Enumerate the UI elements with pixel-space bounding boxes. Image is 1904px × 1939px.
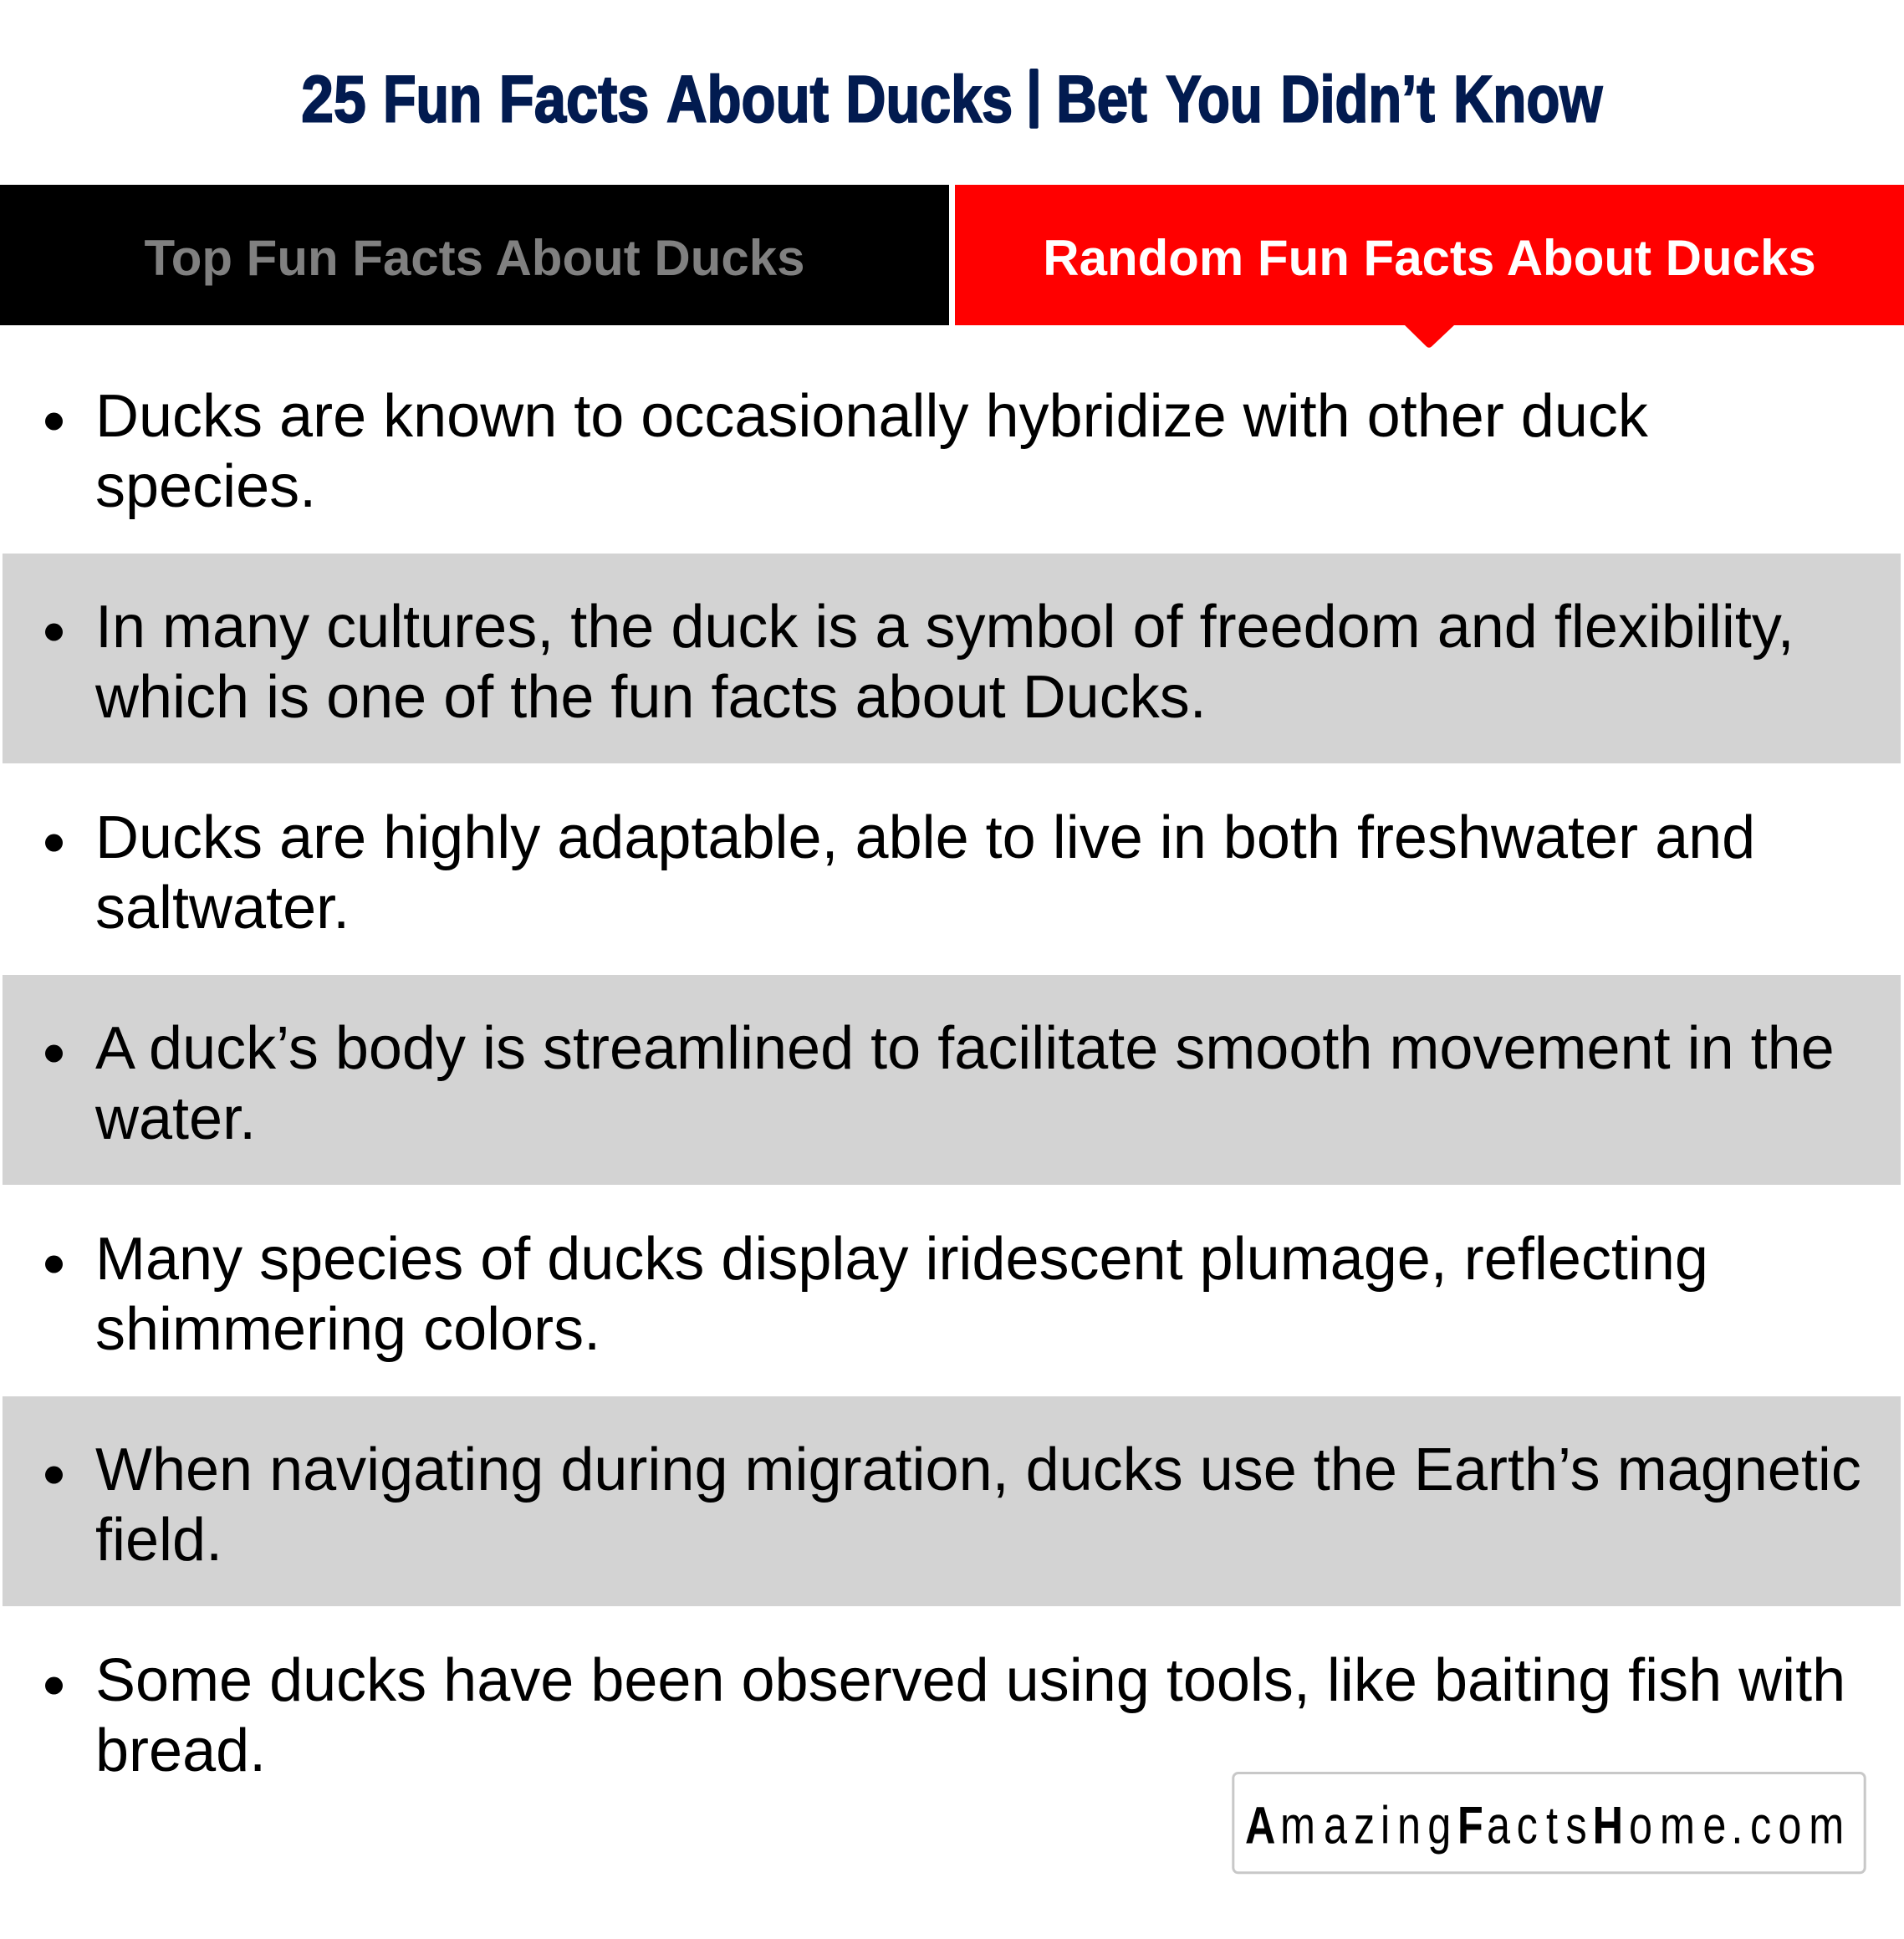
fact 1: Ducks are known to occasionally hybridize with other duck	[95, 383, 1649, 450]
fact 6: When navigating during migration, ducks use the Earth’s magnetic	[95, 1436, 1861, 1503]
fact 4: A duck’s body is streamlined to facilitate smooth movement in the	[95, 1015, 1835, 1082]
fact 6	[3, 1396, 1901, 1606]
title: Bet	[1056, 62, 1147, 136]
fact 5: Many species of ducks display iridescent plumage, reflecting	[95, 1226, 1708, 1293]
watermark logo	[1233, 1773, 1865, 1873]
tab: top fun facts: Top Fun Facts About Ducks	[144, 230, 804, 286]
fact 7: Some ducks have been observed using tools, like baiting fish with	[95, 1647, 1845, 1714]
tab: random fun facts (active)	[955, 185, 1904, 348]
fact 2: In many cultures, the duck is a symbol of freedom and flexibility,	[95, 594, 1794, 661]
fact 1	[45, 383, 1649, 520]
fact 5: shimmering colors.	[95, 1296, 600, 1363]
title: Didn’t	[1280, 62, 1435, 136]
title: About	[666, 62, 829, 136]
fact 2	[3, 554, 1901, 763]
tab: random fun facts (active): Random Fun Facts About Ducks	[1043, 230, 1816, 286]
fact 7	[45, 1647, 1845, 1784]
fact 2: which is one of the fun facts about Ducks.	[94, 664, 1207, 731]
title: Ducks	[845, 62, 1013, 136]
title	[301, 62, 1603, 136]
title: You	[1166, 62, 1263, 136]
fact 1: species.	[95, 453, 316, 520]
fact 6: field.	[95, 1507, 222, 1574]
title: Know	[1453, 62, 1603, 136]
fact 5	[45, 1226, 1708, 1363]
title: Fun	[383, 62, 482, 136]
fact 3	[45, 804, 1755, 941]
fact 3: Ducks are highly adaptable, able to live in both freshwater and	[95, 804, 1755, 871]
watermark logo: AmazingFactsHome.com	[1245, 1796, 1844, 1855]
fact 4	[3, 975, 1901, 1185]
fact 4: water.	[94, 1085, 256, 1152]
title: Facts	[499, 62, 649, 136]
tab: top fun facts	[0, 185, 949, 325]
title: 25	[301, 62, 366, 136]
fact 3: saltwater.	[95, 875, 350, 941]
fact 7: bread.	[95, 1717, 266, 1784]
